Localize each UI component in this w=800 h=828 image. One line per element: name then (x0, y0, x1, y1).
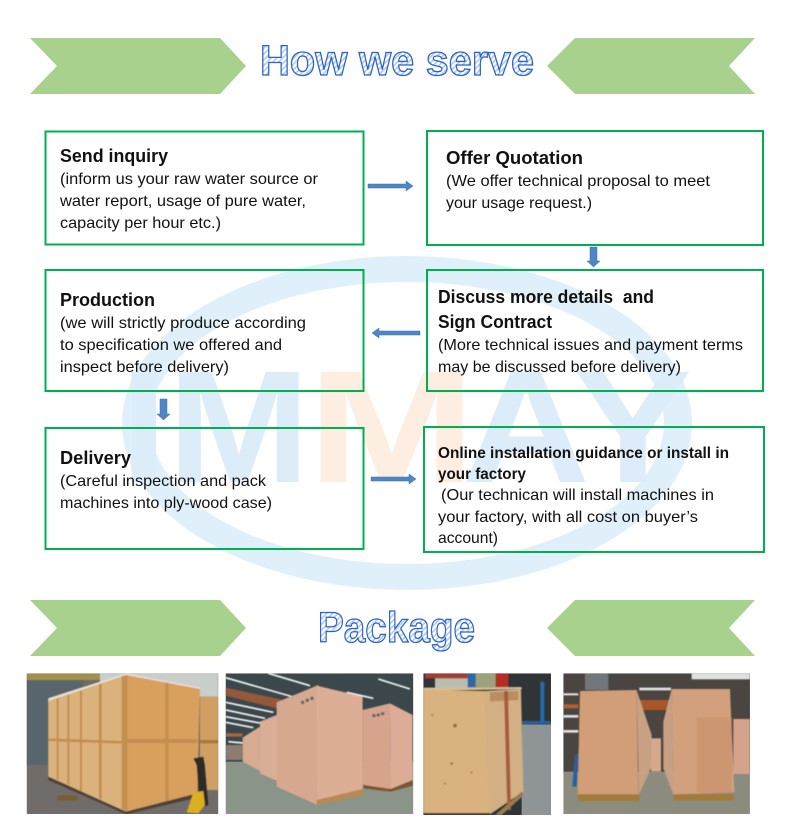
header: How we serve (30, 37, 755, 94)
description (60, 473, 272, 512)
heading: your factory (438, 466, 526, 483)
description: capacity per hour etc.) (60, 215, 221, 232)
left ribbon (30, 600, 246, 656)
watermark ring (122, 256, 692, 590)
description: your factory, with all cost on buyer’s (438, 509, 698, 526)
watermark: IMMAY logo (120, 256, 692, 590)
heading: Discuss more details and (438, 286, 654, 307)
photo: plywood crate close-up (423, 673, 551, 815)
panel: discuss and sign contract (427, 270, 763, 391)
description: (we will strictly produce according (60, 315, 306, 332)
panel: delivery (46, 428, 364, 549)
description (446, 173, 711, 212)
description: account) (438, 530, 498, 547)
photo: wooden crate with pallet truck (27, 673, 218, 814)
description: (inform us your raw water source or (60, 171, 319, 188)
description: (We offer technical proposal to meet (446, 173, 711, 190)
arrow: contract to production (372, 328, 420, 338)
watermark letters: AY (462, 337, 692, 516)
left ribbon (30, 38, 246, 94)
arrow: delivery to installation (371, 474, 416, 484)
arrow: production to delivery (157, 399, 170, 420)
description: your usage request.) (446, 195, 592, 212)
description: inspect before delivery) (60, 359, 229, 376)
description: water report, usage of pure water, (59, 193, 306, 210)
heading (438, 445, 729, 483)
description (60, 315, 306, 376)
photo: two crates facing camera (563, 673, 750, 814)
panel: online installation (424, 427, 764, 552)
description (438, 487, 714, 547)
description: to specification we offered and (60, 337, 282, 354)
description (59, 171, 319, 232)
watermark letters (120, 337, 692, 516)
arrow: quotation to contract (587, 247, 600, 267)
arrow: inquiry to quotation (368, 181, 413, 191)
watermark letters: IM (120, 337, 310, 516)
description: may be discussed before delivery) (438, 359, 681, 376)
right ribbon (547, 600, 755, 656)
description: machines into ply-wood case) (60, 495, 272, 512)
heading: Delivery (60, 447, 132, 468)
description: (Our technican will install machines in (441, 487, 714, 504)
panel: send inquiry (46, 132, 364, 244)
heading: Sign Contract (438, 311, 552, 332)
description: (Careful inspection and pack (60, 473, 267, 490)
right ribbon (547, 38, 755, 94)
title: Package (318, 604, 475, 652)
panel: offer quotation (427, 131, 763, 245)
panel: production (46, 270, 364, 391)
heading: Offer Quotation (446, 147, 583, 168)
heading: Online installation guidance or install in (438, 445, 729, 462)
title: How we serve (260, 37, 534, 85)
header: Package (30, 600, 755, 656)
description: (More technical issues and payment terms (438, 337, 743, 354)
photo: row of crates in warehouse (226, 673, 413, 815)
description (438, 337, 743, 376)
watermark letters: M (307, 337, 476, 516)
heading (438, 286, 654, 332)
heading: Production (60, 289, 155, 310)
heading: Send inquiry (60, 145, 169, 166)
